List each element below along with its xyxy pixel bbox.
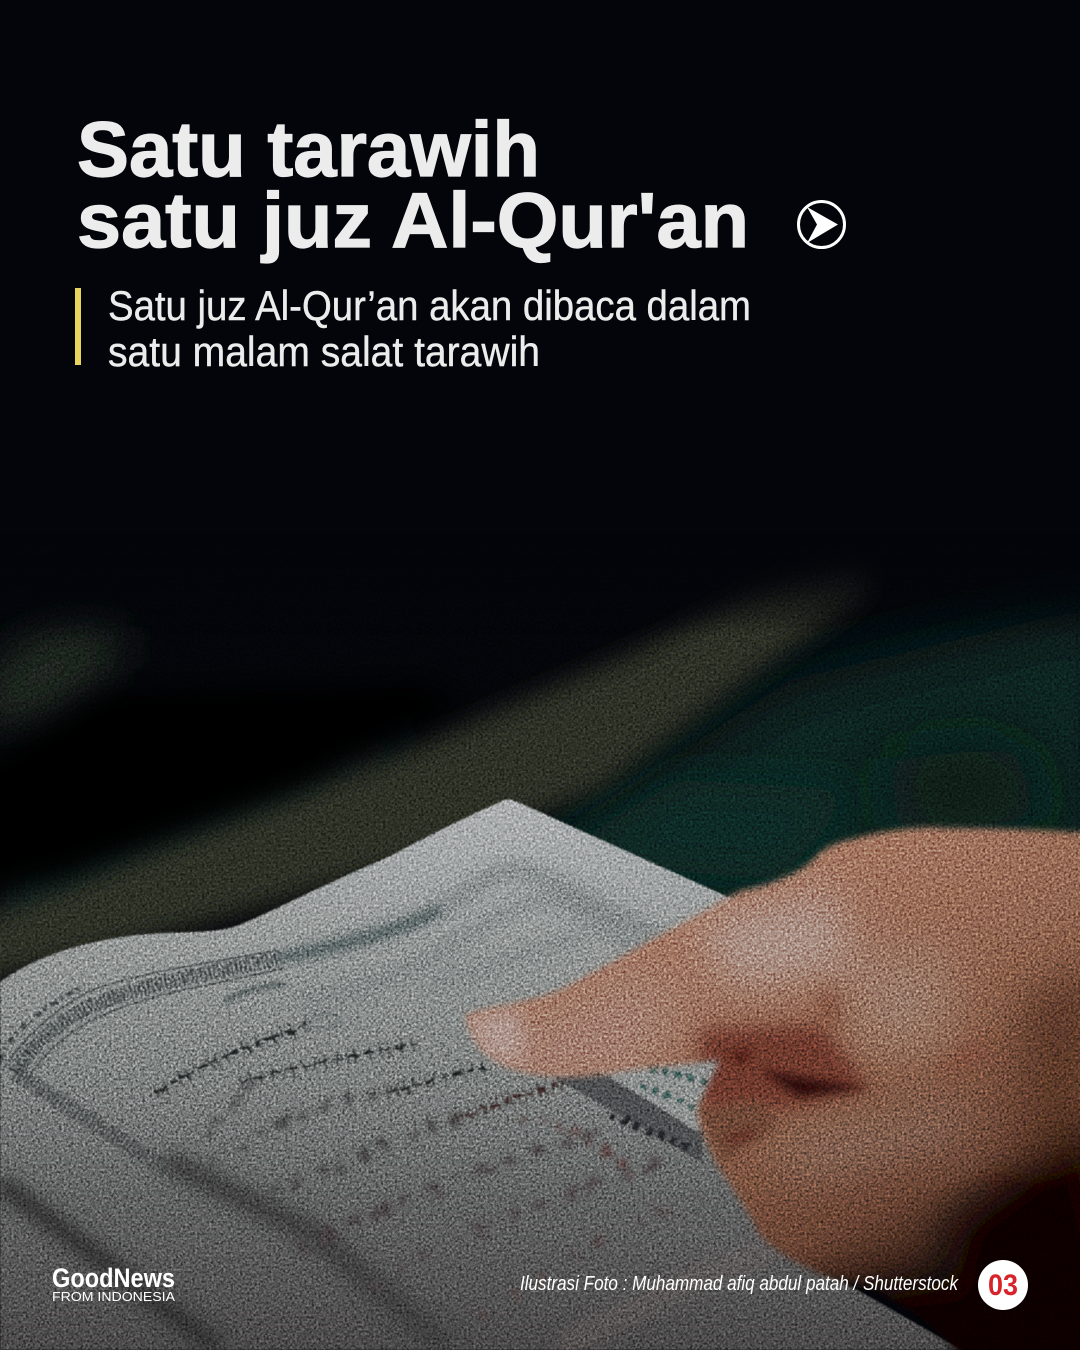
arabic script lines (drawn marks) (157, 985, 700, 1320)
blurred page shading (0, 871, 770, 1350)
hand and pointing finger (464, 822, 1080, 1350)
fingertip pale overlap (462, 1008, 525, 1060)
page number badge: 03 (988, 1269, 1018, 1302)
finger tone (440, 890, 1080, 1350)
photo credit: Ilustrasi Foto : Muhammad afiq abdul patah / Shutterstock (520, 1273, 959, 1295)
ornamental page frame (0, 910, 440, 1168)
logo: GoodNews from Indonesia: GoodNews (52, 1263, 175, 1293)
title: Satu tarawih (77, 105, 540, 193)
open book page (0, 798, 960, 1350)
page number badge (978, 1260, 1028, 1310)
title: satu juz Al-Qur'an (77, 176, 749, 264)
subtitle: Satu juz Al-Qur’an akan dibaca dalam (108, 282, 751, 329)
subtitle: satu malam salat tarawih (108, 328, 540, 375)
logo: GoodNews from Indonesia: FROM INDONESIA (52, 1290, 176, 1304)
logo: GoodNews from Indonesia (52, 1263, 176, 1304)
subtitle (108, 282, 751, 375)
yellow accent bar (75, 288, 81, 365)
title (77, 105, 749, 264)
knuckle creases (700, 1025, 870, 1110)
shadow of finger on page (553, 1070, 703, 1163)
icon: next arrow in circle (798, 202, 844, 248)
background photo: open book and pointing finger (0, 574, 1080, 1350)
blurred green prayer rug background (0, 560, 1080, 985)
